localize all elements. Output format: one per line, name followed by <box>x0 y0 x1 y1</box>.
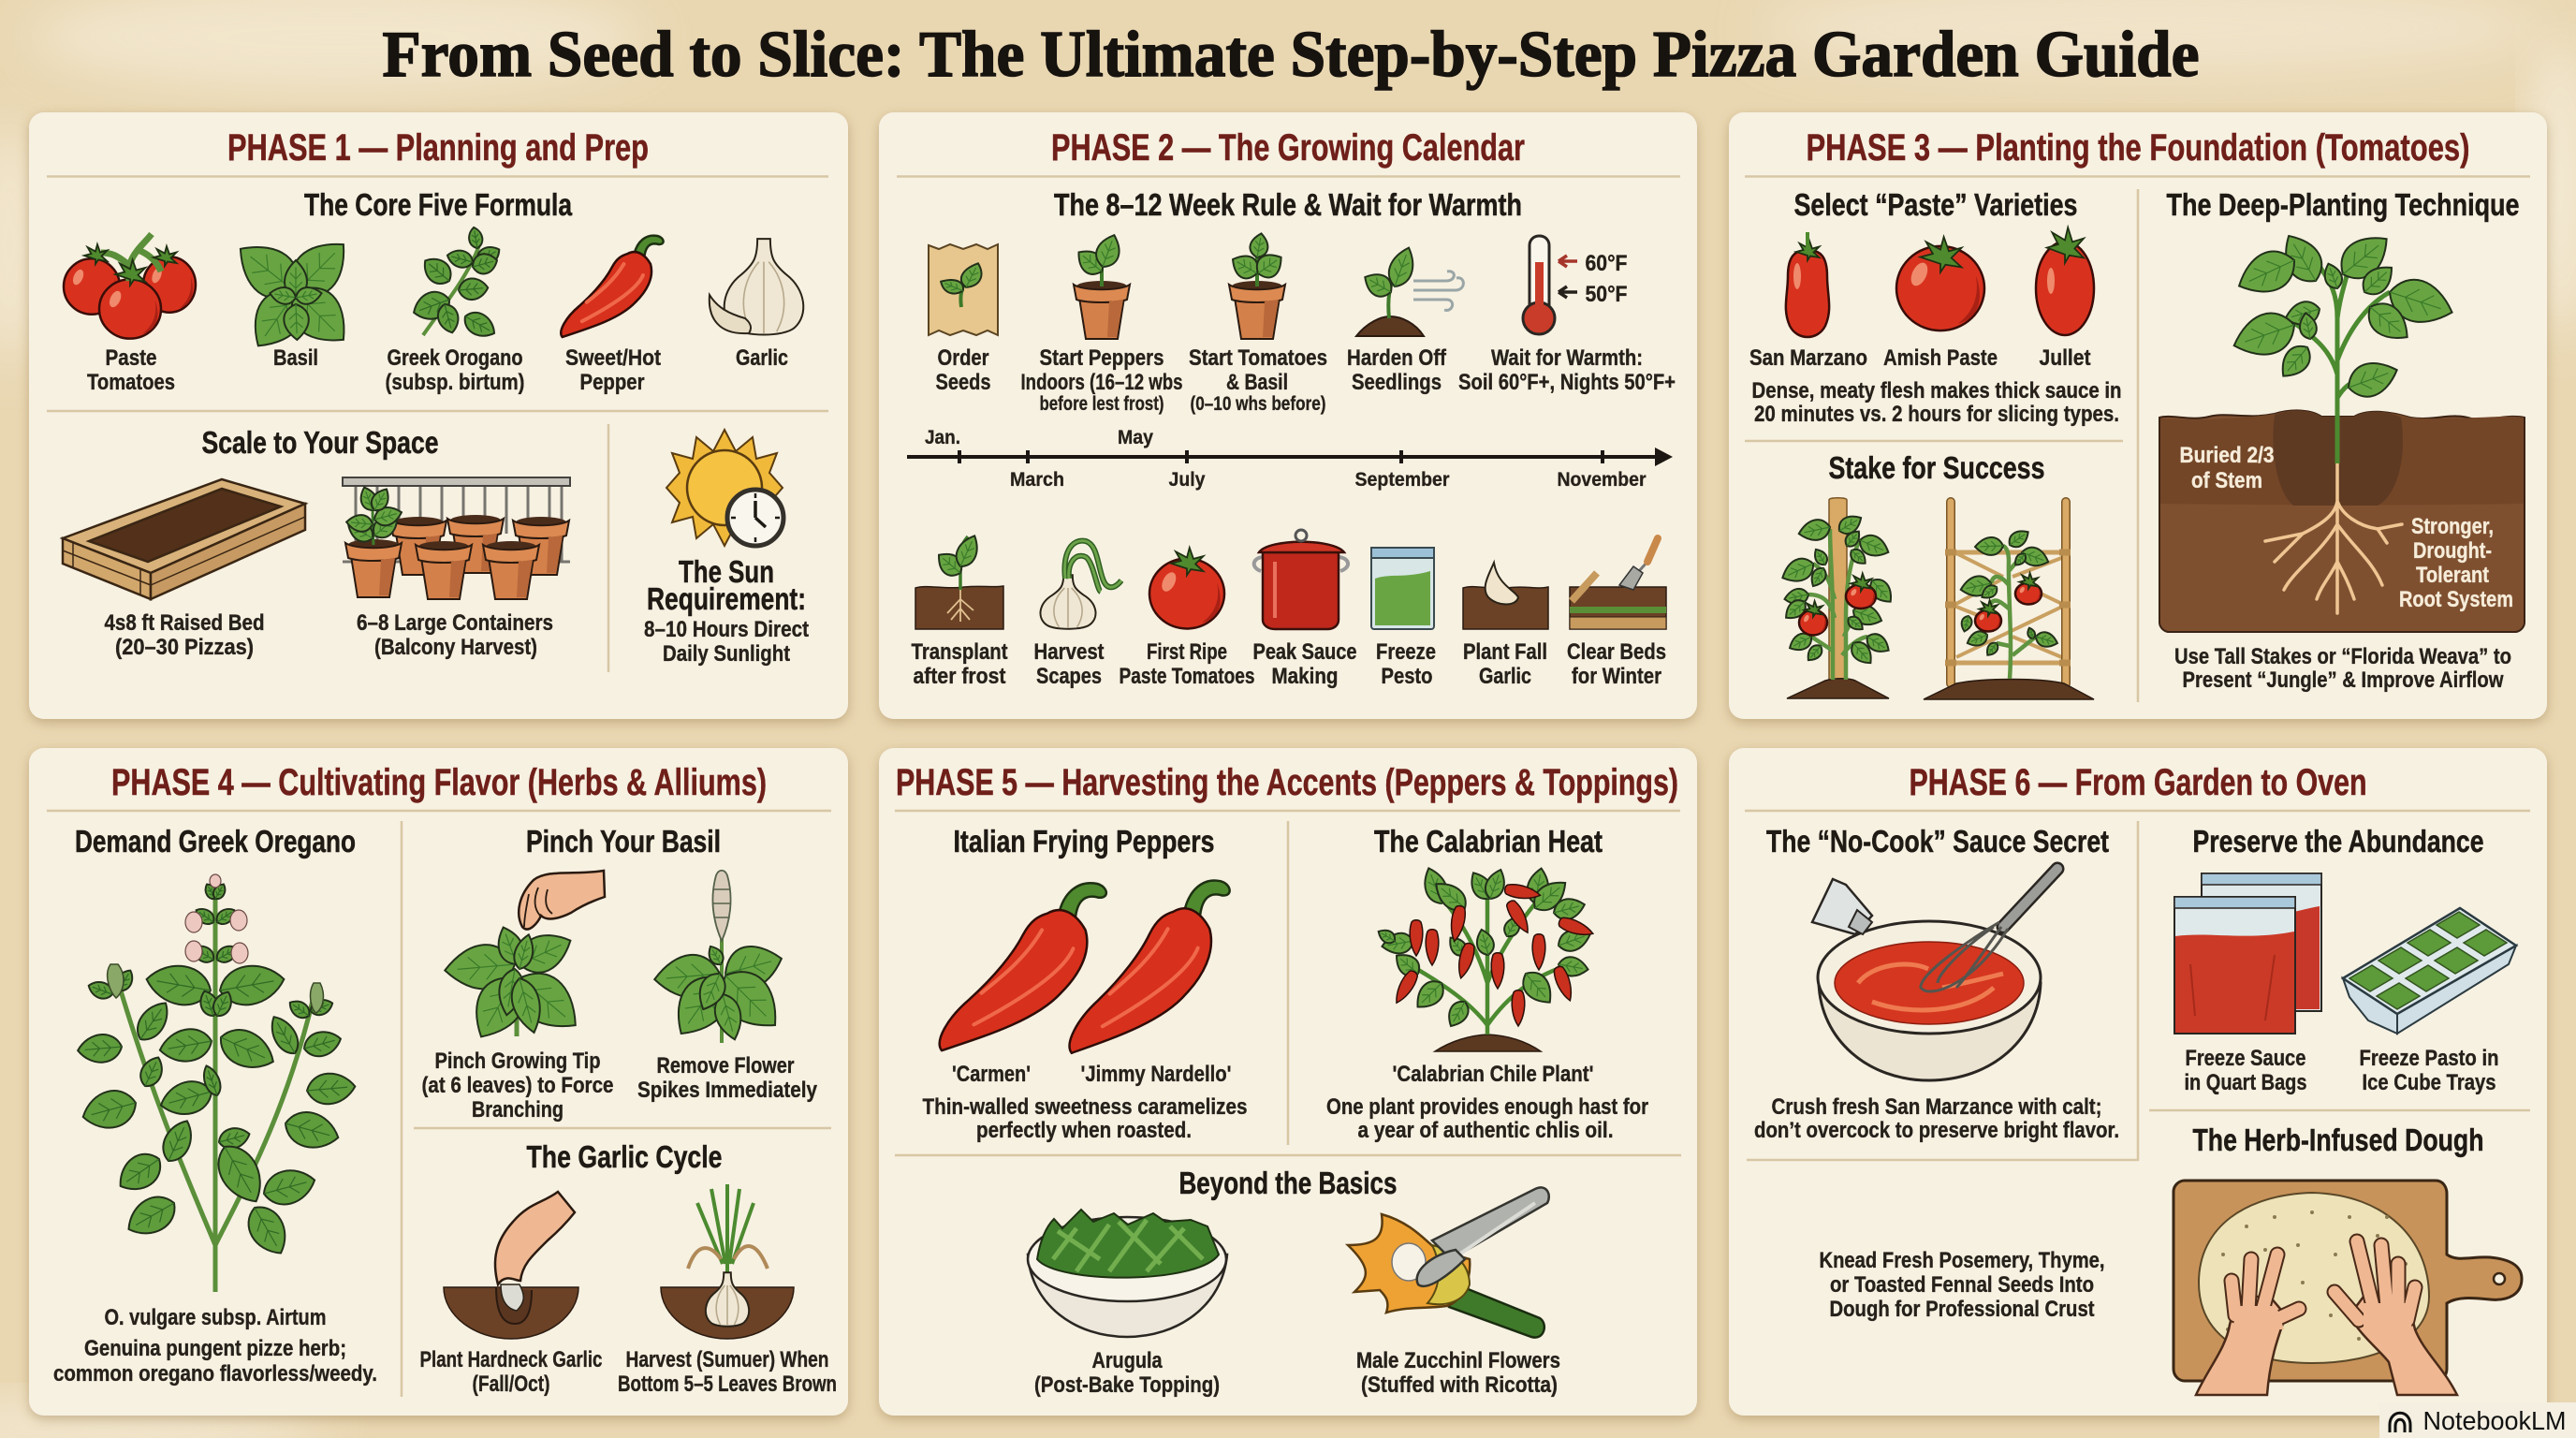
label: freeze sauce <box>2185 1046 2306 1095</box>
label: pinch growing tip <box>421 1049 614 1123</box>
label: wait for warmth: Soil 60°F+, Nights 50°F+ <box>1458 370 1676 395</box>
text block: knead herbs <box>1820 1248 2104 1322</box>
icon: stuffed zucchini flower with tongs <box>1348 1187 1549 1338</box>
icon: ripe tomato <box>1149 548 1224 628</box>
label: harvest scapes <box>1033 639 1105 689</box>
timeline arrow: July <box>1168 469 1206 491</box>
text block: one plant provides: a year of authentic chlis oil. <box>1357 1118 1614 1143</box>
icon: carmen pepper <box>940 883 1106 1050</box>
label: freeze pesto: Pesto <box>1382 664 1432 689</box>
label: san marzano: San Marzano <box>1749 345 1867 371</box>
label: clear beds: Clear Beds <box>1567 639 1666 665</box>
label: peak sauce: Peak Sauce <box>1252 639 1357 665</box>
label: greek oregano <box>386 345 524 395</box>
label: freeze sauce: in Quart Bags <box>2185 1070 2306 1095</box>
icon: dough on wooden board with hands <box>2174 1181 2522 1395</box>
label: harden off <box>1347 345 1447 395</box>
text block: thin-walled sweetness <box>923 1094 1247 1143</box>
label: freeze pesto: Ice Cube Trays <box>2363 1070 2496 1095</box>
icon: frozen pesto bag <box>1371 548 1434 629</box>
icon: staked tomato plant <box>1778 498 1897 698</box>
icon: balcony containers <box>343 477 570 599</box>
label: first ripe: Paste Tomatoes <box>1120 664 1254 689</box>
label: wait for warmth <box>1458 345 1676 395</box>
text block: dense meaty flesh <box>1752 378 2121 427</box>
callout: buried 2/3 of stem <box>2179 443 2275 493</box>
icon: sauce bowl with whisk and shaker <box>1812 869 2057 1080</box>
icon: greek oregano plant <box>77 874 357 1292</box>
label: remove flower spikes <box>637 1053 818 1103</box>
icon: clear beds <box>1570 538 1666 629</box>
logo: NotebookLM badge <box>2379 1402 2576 1438</box>
label: start tomatoes <box>1189 345 1327 415</box>
labels: pepper varieties <box>952 1062 1232 1087</box>
label: start peppers: before lest frost) <box>1039 393 1164 415</box>
label: amish paste: Amish Paste <box>1883 345 1998 371</box>
text block: oregano note: Genuina pungent pizze herb; <box>84 1336 346 1361</box>
subheading: garlic cycle: The Garlic Cycle <box>526 1139 723 1174</box>
icon: jimmy nardello pepper <box>1070 881 1230 1053</box>
subheading: 8-12 week rule: The 8–12 Week Rule & Wait for Warmth <box>1054 187 1522 222</box>
icon: sweet hot pepper <box>561 236 664 337</box>
label: greek oregano: Greek Orogano <box>388 345 522 371</box>
text block: sun requirement: Requirement: <box>647 581 806 616</box>
icon: arugula bowl <box>1028 1210 1227 1337</box>
label: paste tomatoes: Tomatoes <box>87 370 175 395</box>
label: arugula <box>1034 1348 1220 1398</box>
subheading: beyond the basics: Beyond the Basics <box>1179 1166 1397 1200</box>
label: calabrian chile plant: 'Calabrian Chile Plant' <box>1393 1062 1593 1087</box>
callout: stronger root system: Tolerant <box>2416 563 2489 588</box>
text block: dense meaty flesh: Dense, meaty flesh makes thick sauce in <box>1752 378 2121 404</box>
panel: phase 2 growing calendar <box>879 112 1697 719</box>
label: pepper <box>565 345 661 395</box>
label: harvest garlic: Harvest (Sumuer) When <box>625 1347 829 1372</box>
text block: crush san marzano: don’t overcock to preserve bright flavor. <box>1754 1118 2119 1143</box>
subheading: italian frying peppers: Italian Frying Peppers <box>953 824 1215 858</box>
text block: crush san marzano <box>1754 1094 2119 1143</box>
timeline arrow: May <box>1118 427 1153 448</box>
icon: sun and clock <box>666 430 783 546</box>
callout: stronger root system <box>2399 514 2513 612</box>
label: harvest garlic: Bottom 5–5 Leaves Brown <box>618 1372 837 1397</box>
icon: harvest garlic <box>661 1184 794 1339</box>
text block: knead herbs: or Toasted Fennal Seeds Into <box>1830 1272 2094 1298</box>
icon: basil <box>227 228 360 359</box>
timeline arrow: September <box>1355 469 1449 491</box>
label: start tomatoes: Start Tomatoes <box>1189 345 1327 371</box>
label: harvest scapes: Scapes <box>1036 664 1102 689</box>
label: freeze sauce: Freeze Sauce <box>2185 1046 2306 1071</box>
icon: amish paste <box>1896 237 1984 330</box>
text block: knead herbs: Knead Fresh Posemery, Thyme, <box>1820 1248 2104 1273</box>
icon: greek oregano <box>409 227 504 343</box>
label: plant hardneck garlic: Plant Hardneck Garlic <box>419 1347 603 1372</box>
label: garlic: Garlic <box>736 345 788 371</box>
subheading: preserve the abundance: Preserve the Abundance <box>2192 824 2484 858</box>
label: harden off: Seedlings <box>1352 370 1442 395</box>
label: raised bed: 4s8 ft Raised Bed <box>105 610 264 636</box>
text block: dense meaty flesh: 20 minutes vs. 2 hours for slicing types. <box>1754 402 2119 427</box>
arrow: 60F <box>1559 251 1627 276</box>
callout: stronger root system: Stronger, <box>2411 514 2494 539</box>
icon: tomato seedling pot <box>1227 232 1287 339</box>
subheading: select paste varieties: Select “Paste” Varieties <box>1793 187 2078 222</box>
icon: seed packet <box>929 244 998 335</box>
label: containers <box>357 610 553 660</box>
subheading: pinch your basil: Pinch Your Basil <box>526 824 721 858</box>
icon: pepper seedling pot <box>1072 231 1130 339</box>
label: zucchini flowers <box>1356 1348 1560 1398</box>
label: raised bed: (20–30 Pizzas) <box>115 635 254 660</box>
label: order seeds: Order <box>938 345 988 371</box>
label: transplant: Transplant <box>912 639 1008 665</box>
logo: NotebookLM badge: NotebookLM <box>2422 1406 2567 1435</box>
phase 6 heading: PHASE 6 — From Garden to Oven <box>1910 762 2366 803</box>
panel: phase 3 planting the foundation <box>1729 112 2547 719</box>
icon: freezer bags of sauce <box>2174 873 2321 1034</box>
icon: pinching basil <box>443 871 605 1048</box>
icon: florida weave trellis <box>1924 502 2094 699</box>
label: basil: Basil <box>273 345 318 371</box>
label: start peppers <box>1020 345 1183 415</box>
label: clear beds <box>1567 639 1666 689</box>
icon: juliet <box>2036 227 2094 335</box>
icon: transplant <box>915 532 1003 629</box>
label: paste tomatoes: Paste <box>105 345 157 371</box>
label: start peppers: Start Peppers <box>1039 345 1164 371</box>
label: harvest garlic <box>618 1347 837 1397</box>
text block: one plant provides <box>1326 1094 1648 1143</box>
text block: tall stakes: Present “Jungle” & Improve Airflow <box>2183 668 2504 693</box>
subheading: scale to your space: Scale to Your Space <box>202 425 438 460</box>
callout: stronger root system: Drought- <box>2413 538 2492 564</box>
text block: oregano note: O. vulgare subsp. Airtum <box>105 1305 326 1330</box>
text block: crush san marzano: Crush fresh San Marzance with calt; <box>1771 1094 2102 1120</box>
icon: raised bed <box>63 479 305 599</box>
arrow: 50F <box>1559 282 1627 307</box>
label: start peppers: Indoors (16–12 wbs <box>1020 370 1183 395</box>
label: freeze pesto <box>2359 1046 2499 1095</box>
label: start tomatoes: & Basil <box>1226 370 1288 395</box>
text block: one plant provides: One plant provides enough hast for <box>1326 1094 1648 1120</box>
timeline arrow <box>907 427 1673 491</box>
label: freeze pesto <box>1376 639 1436 689</box>
icon: fall garlic clove <box>1463 563 1548 629</box>
text block: tall stakes: Use Tall Stakes or “Florida Weava” to <box>2174 644 2511 669</box>
label: paste tomatoes <box>87 345 175 395</box>
subheading: no-cook sauce: The “No-Cook” Sauce Secret <box>1766 824 2109 858</box>
phase 2 heading: PHASE 2 — The Growing Calendar <box>1051 127 1525 169</box>
timeline arrow: November <box>1558 469 1646 491</box>
callout: stronger root system: Root System <box>2399 587 2513 612</box>
text block: thin-walled sweetness: perfectly when roasted. <box>976 1118 1192 1143</box>
label: pinch growing tip: Branching <box>472 1097 564 1123</box>
label: order seeds: Seeds <box>936 370 990 395</box>
label: raised bed <box>105 610 264 660</box>
label: freeze pesto: Freeze <box>1376 639 1436 665</box>
arrow: 60F: 60°F <box>1586 251 1627 276</box>
label: harvest scapes: Harvest <box>1033 639 1105 665</box>
label: remove flower spikes: Spikes Immediately <box>637 1078 818 1103</box>
label: arugula: Arugula <box>1091 1348 1163 1373</box>
text block: knead herbs: Dough for Professional Crust <box>1829 1297 2095 1322</box>
panel: phase 4 cultivating flavor <box>29 748 848 1416</box>
panel: phase 1 planning and prep <box>29 112 848 719</box>
labels: pepper varieties: 'Carmen' <box>952 1062 1031 1087</box>
text block: sun requirement: 8–10 Hours Direct <box>644 617 809 642</box>
icon: garlic <box>710 239 803 335</box>
icon: planting garlic <box>444 1192 578 1339</box>
label: greek oregano: (subsp. birtum) <box>386 370 524 395</box>
label: harden off: Harden Off <box>1347 345 1447 371</box>
text block: sun requirement: The Sun <box>679 554 774 589</box>
phase 4 heading: PHASE 4 — Cultivating Flavor (Herbs & Alliums) <box>111 762 767 803</box>
label: first ripe <box>1120 639 1254 689</box>
label: clear beds: for Winter <box>1572 664 1661 689</box>
label: containers: (Balcony Harvest) <box>374 635 537 660</box>
label: wait for warmth: Wait for Warmth: <box>1491 345 1643 371</box>
label: plant hardneck garlic: (Fall/Oct) <box>472 1372 550 1397</box>
icon: harden off seedling <box>1356 244 1463 336</box>
label: pepper: Pepper <box>580 370 644 395</box>
text block: oregano note: common oregano flavorless/weedy. <box>53 1361 377 1387</box>
callout: buried 2/3 of stem: of Stem <box>2191 468 2262 493</box>
text block: tall stakes <box>2174 644 2511 693</box>
subheading: herb-infused dough: The Herb-Infused Dough <box>2192 1123 2484 1157</box>
label: plant fall garlic: Garlic <box>1479 664 1531 689</box>
text block: oregano note <box>53 1305 377 1387</box>
icon: paste tomatoes <box>64 234 196 339</box>
text block: thin-walled sweetness: Thin-walled sweetness caramelizes <box>923 1094 1247 1120</box>
callout: buried 2/3 of stem: Buried 2/3 <box>2179 443 2275 468</box>
labels: pepper varieties: 'Jimmy Nardello' <box>1080 1062 1232 1087</box>
label: arugula: (Post-Bake Topping) <box>1034 1372 1220 1398</box>
label: remove flower spikes: Remove Flower <box>657 1053 794 1078</box>
panel: phase 6 from garden to oven <box>1729 748 2547 1416</box>
label: transplant <box>912 639 1008 689</box>
label: plant fall garlic <box>1463 639 1547 689</box>
label: zucchini flowers: (Stuffed with Ricotta) <box>1361 1372 1558 1398</box>
subheading: calabrian heat: The Calabrian Heat <box>1374 824 1603 858</box>
text block: sun requirement: Daily Sunlight <box>663 641 790 667</box>
label: pepper: Sweet/Hot <box>565 345 661 371</box>
panel: phase 5 harvesting the accents <box>879 748 1697 1416</box>
arrow: 50F: 50°F <box>1586 282 1627 307</box>
phase 5 heading: PHASE 5 — Harvesting the Accents (Peppers & Toppings) <box>896 762 1678 803</box>
label: start tomatoes: (0–10 whs before) <box>1191 393 1325 415</box>
timeline arrow: March <box>1010 469 1064 491</box>
label: zucchini flowers: Male Zucchinl Flowers <box>1356 1348 1560 1373</box>
icon: deep-planted tomato with roots <box>2159 226 2525 632</box>
label: first ripe: First Ripe <box>1147 639 1227 665</box>
subheading: core five: The Core Five Formula <box>304 187 573 222</box>
label: plant fall garlic: Plant Fall <box>1463 639 1547 665</box>
icon: thermometer <box>1523 236 1555 334</box>
icon: garlic scapes <box>1040 541 1121 629</box>
timeline arrow: Jan. <box>925 427 960 448</box>
label: juliet: Jullet <box>2039 345 2091 371</box>
icon: calabrian chile plant <box>1376 865 1595 1051</box>
label: pinch growing tip: (at 6 leaves) to Force <box>421 1073 614 1098</box>
title: From Seed to Slice: The Ultimate Step-by-Step Pizza Garden Guide <box>382 19 2200 91</box>
label: containers: 6–8 Large Containers <box>357 610 553 636</box>
label: peak sauce <box>1252 639 1357 689</box>
label: transplant: after frost <box>914 664 1005 689</box>
label: order seeds <box>936 345 990 395</box>
label: plant hardneck garlic <box>419 1347 603 1397</box>
icon: basil with flower spike <box>652 871 791 1047</box>
label: pinch growing tip: Pinch Growing Tip <box>434 1049 601 1074</box>
subheading: stake for success: Stake for Success <box>1829 450 2044 485</box>
icon: ice cube tray of pesto <box>2343 908 2516 1034</box>
label: freeze pesto: Freeze Pasto in <box>2359 1046 2499 1071</box>
label: peak sauce: Making <box>1271 664 1339 689</box>
phase 1 heading: PHASE 1 — Planning and Prep <box>227 127 649 169</box>
icon: san marzano <box>1786 232 1829 337</box>
text block: sun requirement <box>644 554 809 667</box>
subheading: demand greek oregano: Demand Greek Oregano <box>75 824 356 858</box>
icon: sauce pot <box>1254 530 1348 629</box>
